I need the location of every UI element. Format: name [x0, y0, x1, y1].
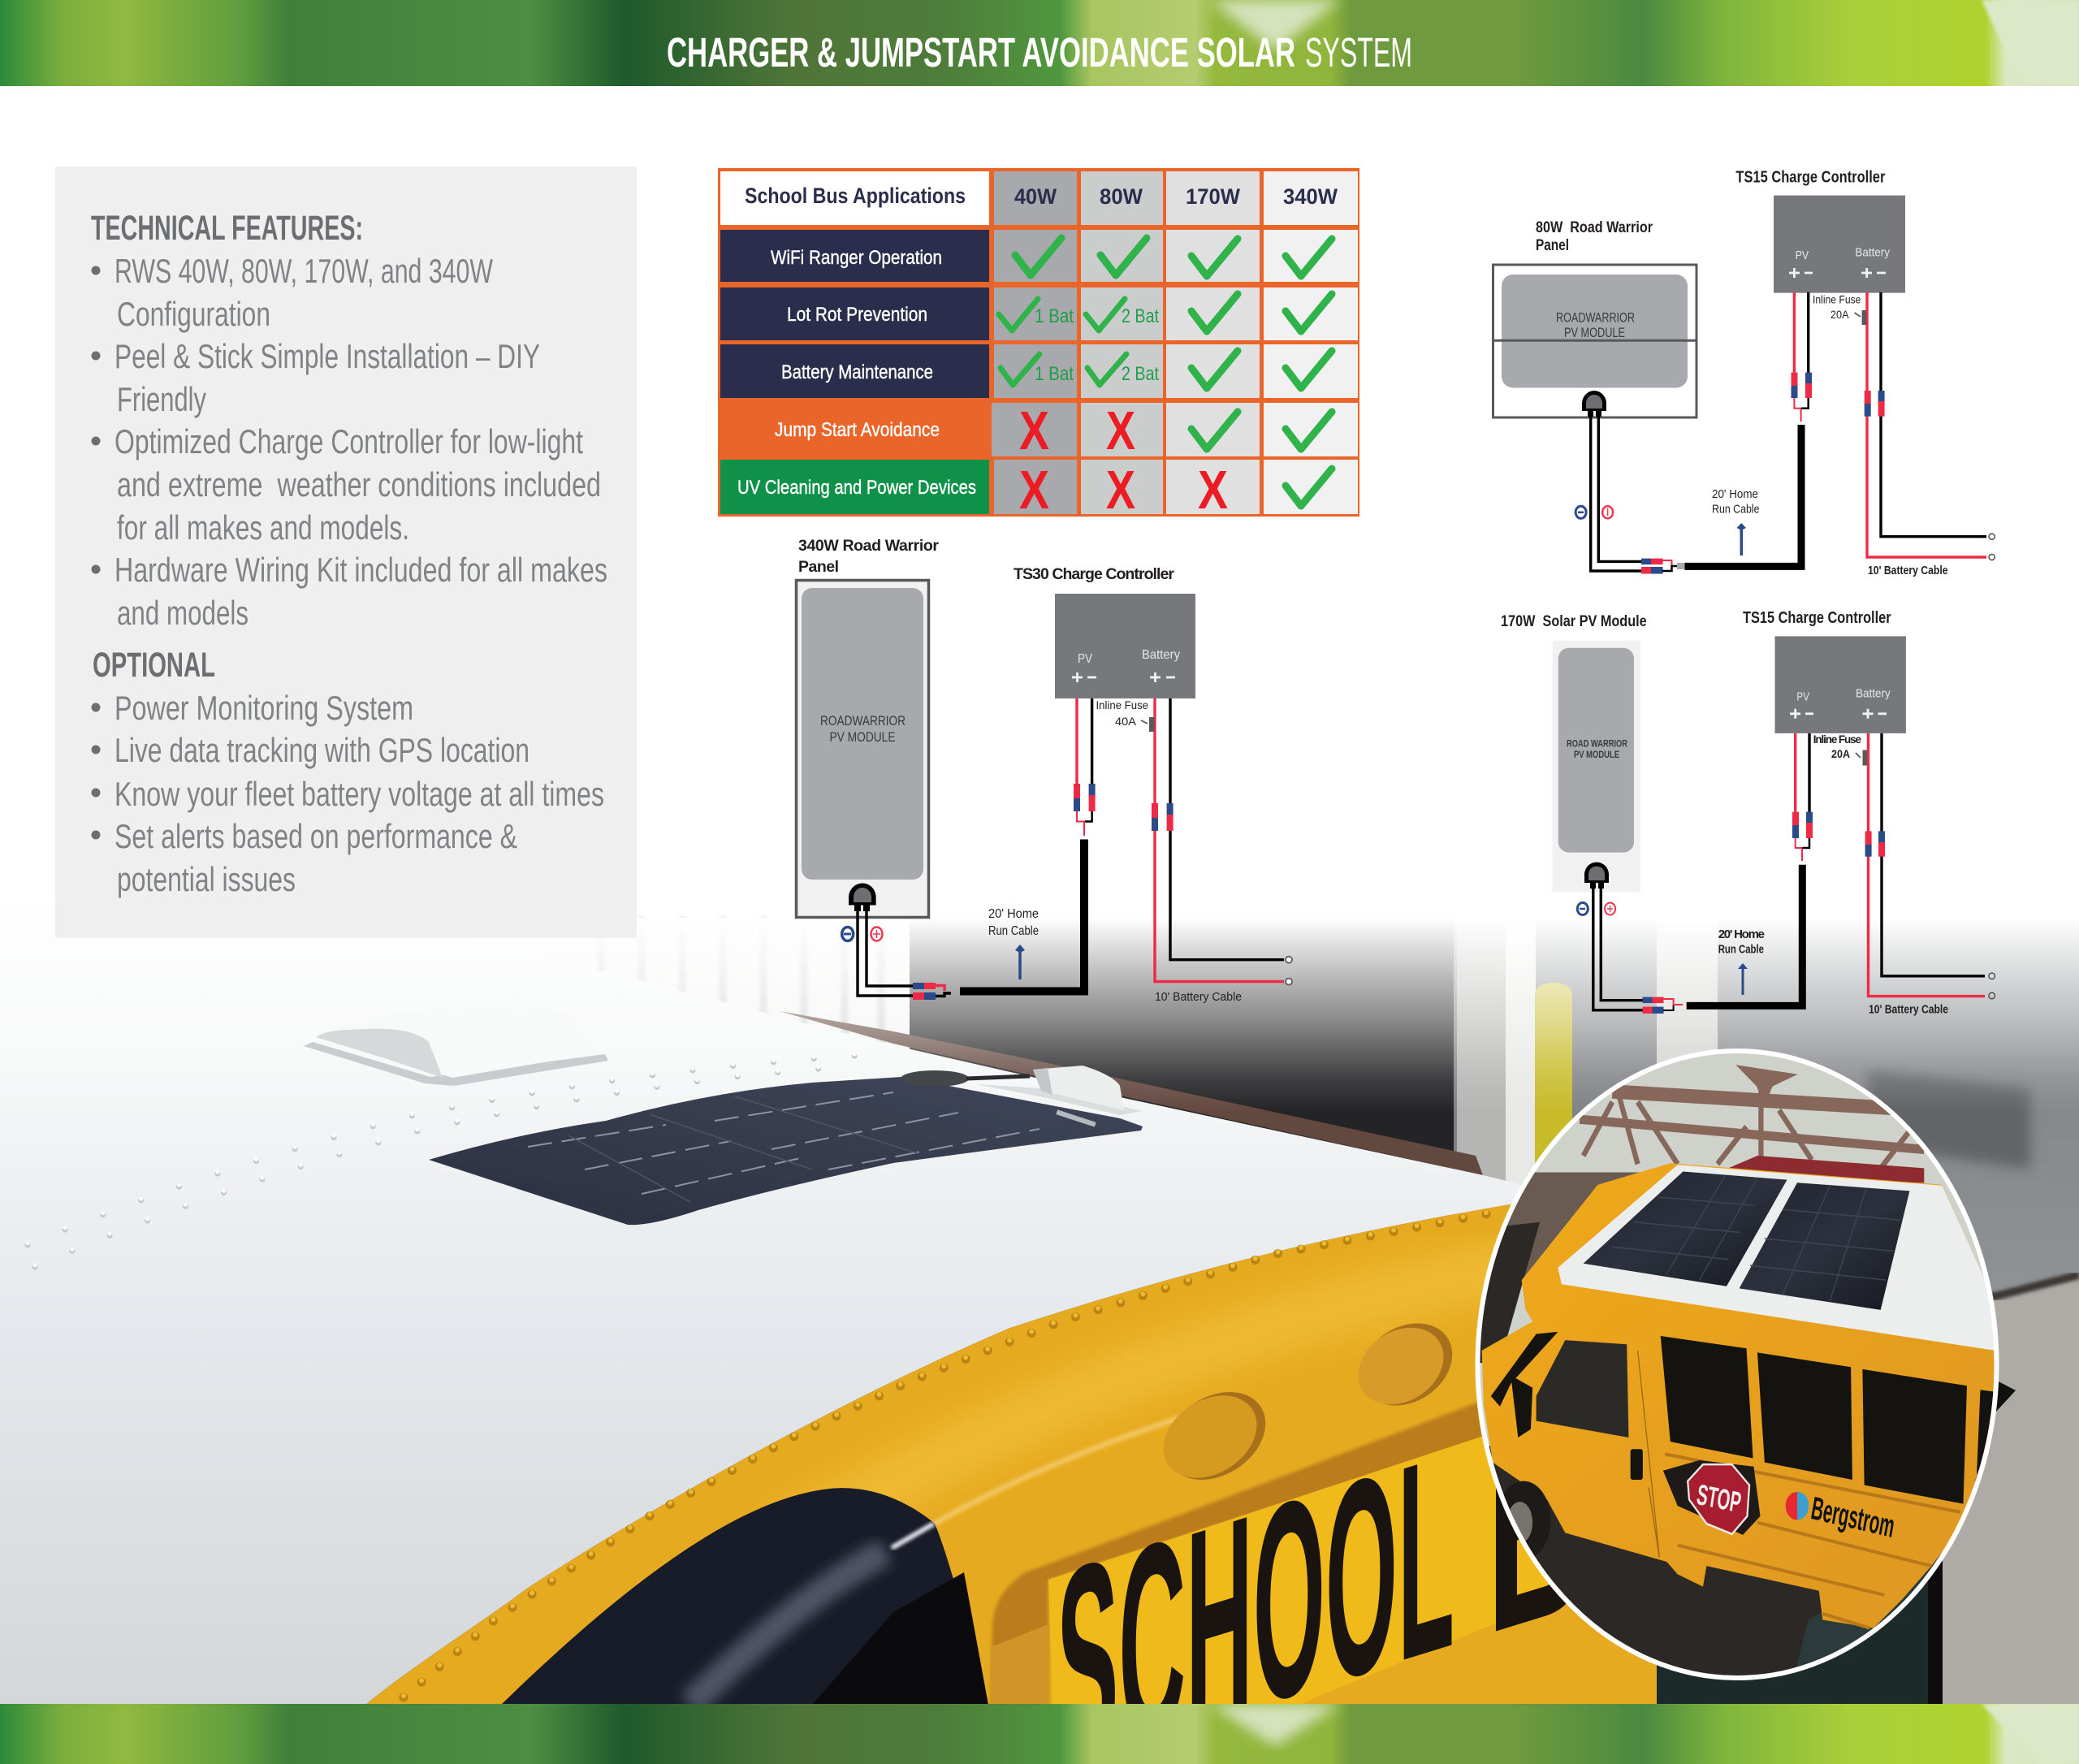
battery count labels: 1 Bat: [1035, 363, 1074, 385]
panel leads and connectors: [858, 910, 951, 1000]
solar panel: [1493, 265, 1697, 417]
home run cable label: Run Cable: [988, 924, 1039, 938]
roof vent: [304, 1028, 608, 1086]
inline fuse: Inline Fuse: [1813, 294, 1861, 305]
X marks: X: [1106, 400, 1135, 461]
solar panel: ROADWARRIOR: [820, 714, 906, 729]
battery count labels: 1 Bat: [1035, 305, 1074, 327]
TS15 charge controller: Battery: [1855, 246, 1890, 260]
X marks: X: [1019, 400, 1049, 461]
inline fuse: Inline Fuse: [1096, 698, 1148, 711]
optional list: Live data tracking with GPS location: [115, 731, 529, 769]
home run cable label: 20' Home: [988, 907, 1039, 921]
features list: Friendly: [117, 380, 206, 418]
table cell backgrounds: [720, 171, 1358, 514]
title: SYSTEM: [1305, 29, 1412, 76]
TS15 charge controller: PV: [1796, 249, 1809, 262]
wheel: [1504, 1481, 1551, 1556]
solar panel on roof: [429, 1070, 1143, 1225]
yellow bus side: [365, 1194, 1657, 1705]
SCHOOL lettering on bus: [1062, 1464, 1566, 1704]
bus body: [1482, 1163, 2004, 1628]
controller title: TS15 Charge Controller: [1735, 168, 1886, 186]
features list: RWS 40W, 80W, 170W, and 340W: [115, 252, 493, 290]
inline fuse: 20A: [1831, 748, 1850, 760]
bottom green band: [0, 1704, 2079, 1764]
table header labels: School Bus Applications: [745, 184, 966, 208]
home run cable arrow: [1737, 523, 1746, 556]
table row labels: WiFi Ranger Operation: [771, 247, 942, 269]
battery count labels: 2 Bat: [1122, 363, 1159, 385]
Bergstrom logo: Bergstrom: [1809, 1489, 1897, 1544]
panel leads and connectors: [1593, 888, 1683, 1014]
panel title: [798, 537, 939, 576]
side stripes: [1665, 1454, 1960, 1628]
battery count labels: 2 Bat: [1122, 305, 1159, 327]
features list: and models: [117, 594, 249, 632]
panel title: 170W Solar PV Module: [1501, 612, 1647, 630]
polarity icons: [1577, 903, 1615, 914]
optional list: Power Monitoring System: [115, 689, 413, 727]
TS15 charge controller: [1774, 196, 1905, 293]
battery cable label: 10' Battery Cable: [1868, 564, 1947, 577]
solar panel: PV MODULE: [1574, 750, 1619, 760]
table row labels: UV Cleaning and Power Devices: [737, 477, 976, 499]
panel title: Panel: [1536, 236, 1569, 254]
home run cable: [1687, 865, 1802, 1005]
SCHOOL lettering on bus: B: [1486, 1351, 1592, 1694]
inline fuse: [1813, 733, 1867, 765]
panel title: Panel: [798, 558, 839, 576]
home run cable label: Run Cable: [1712, 502, 1759, 517]
inline fuse: 20A: [1830, 309, 1849, 321]
table row labels: Lot Rot Prevention: [787, 304, 927, 326]
table row labels: Battery Maintenance: [781, 361, 933, 383]
table header labels: 80W: [1100, 184, 1143, 209]
features list: [91, 252, 607, 632]
TS30 charge controller: Battery: [1142, 648, 1180, 662]
building backdrop: [366, 916, 2079, 1704]
solar panel: [796, 580, 929, 918]
features list: for all makes and models.: [117, 508, 409, 547]
bridge railing: [1580, 1066, 1924, 1168]
PV side wiring: [1792, 733, 1813, 861]
home run cable label: 20' Home: [1712, 487, 1758, 501]
table header labels: 40W: [1014, 184, 1057, 209]
home run cable: [960, 840, 1084, 991]
TS15 charge controller: [1775, 636, 1906, 733]
white bus roof: [1558, 1165, 2000, 1351]
panel: technical features: [55, 166, 637, 938]
TS30 charge controller: [1055, 594, 1195, 698]
home run cable label: [988, 907, 1039, 938]
features list: Hardware Wiring Kit included for all makes: [115, 551, 607, 589]
inline fuse: [1096, 698, 1155, 732]
solar panel: ROADWARRIOR: [1556, 311, 1635, 326]
home run cable arrow: [1015, 945, 1025, 979]
features list: Configuration: [117, 295, 270, 333]
junction box: [1584, 863, 1609, 888]
TS15 charge controller: Battery: [1856, 686, 1891, 700]
inline fuse: 40A: [1115, 715, 1137, 728]
optional list: potential issues: [117, 860, 296, 898]
X marks: X: [1198, 460, 1228, 521]
roof rivets: [28, 1053, 870, 1267]
battery side wiring: [1152, 698, 1292, 985]
inline fuse: [1813, 294, 1866, 325]
polarity icons: [842, 927, 882, 940]
optional list: Set alerts based on performance &: [115, 817, 517, 855]
white antenna mount: [976, 1066, 1143, 1115]
table header labels: 340W: [1283, 184, 1338, 209]
panel title: 80W Road Warrior: [1536, 218, 1653, 236]
home run cable label: 20' Home: [1718, 927, 1765, 941]
X marks: X: [1106, 460, 1135, 521]
wiring diagram: 170W Solar PV Module: [1501, 609, 1995, 1017]
heading: optional: OPTIONAL: [93, 646, 215, 685]
wiring diagram: 340W Road Warrior: [796, 537, 1292, 1004]
controller title: TS30 Charge Controller: [1014, 565, 1174, 583]
PV side wiring: [1792, 292, 1812, 422]
home run cable: [1684, 425, 1801, 566]
solar panel: ROAD WARRIOR: [1567, 739, 1628, 749]
solar panel: PV MODULE: [1564, 326, 1625, 340]
stop sign: [1663, 1460, 1761, 1535]
TS15 charge controller: PV: [1796, 690, 1809, 704]
Bergstrom logo: [1785, 1491, 1894, 1537]
table header labels: [745, 184, 1338, 209]
roof solar panels: [1584, 1171, 1909, 1310]
junction box: [1582, 391, 1606, 417]
panel leads and connectors: [1591, 416, 1684, 573]
polarity icons: [1575, 506, 1613, 518]
panel title: 340W Road Warrior: [798, 537, 939, 555]
features list: and extreme weather conditions included: [117, 465, 601, 504]
battery side wiring: [1865, 733, 1995, 999]
check marks: [999, 238, 1332, 506]
features list: Optimized Charge Controller for low-light: [115, 422, 583, 460]
inline fuse: Inline Fuse: [1813, 733, 1861, 746]
table row labels: [737, 247, 976, 499]
features list: Peel & Stick Simple Installation – DIY: [115, 337, 540, 375]
battery cable label: 10' Battery Cable: [1869, 1004, 1948, 1017]
inset photo: bus with solar panels: [1462, 1040, 2014, 1694]
battery side wiring: [1865, 292, 1995, 560]
optional list: Know your fleet battery voltage at all times: [115, 775, 604, 813]
PV side wiring: [1074, 698, 1096, 836]
black window arch: [501, 1488, 988, 1705]
solar panel: [1553, 640, 1640, 892]
X marks: [1019, 400, 1228, 521]
home run cable arrow: [1738, 963, 1748, 995]
home run cable label: [1718, 927, 1765, 957]
road under bus: [1467, 1222, 1990, 1694]
header band: [0, 0, 2079, 86]
white bus roof: [0, 893, 1527, 1705]
stop sign: STOP: [1695, 1479, 1743, 1520]
amber marker lights: [1148, 1307, 1467, 1498]
controller title: TS15 Charge Controller: [1743, 609, 1891, 627]
home run cable label: Run Cable: [1718, 942, 1764, 957]
table row labels: Jump Start Avoidance: [775, 419, 940, 441]
optional list: [91, 689, 604, 898]
junction box: [849, 884, 876, 911]
home run cable label: [1712, 487, 1759, 517]
background photo: school bus roof: [0, 893, 2079, 1764]
panel: applications table: [718, 168, 1359, 521]
title: CHARGER & JUMPSTART AVOIDANCE SOLAR: [667, 29, 1295, 76]
wiring diagram: 80W Road Warrior: [1493, 168, 1995, 577]
heading: technical features: TECHNICAL FEATURES:: [91, 209, 363, 248]
X marks: X: [1019, 460, 1049, 521]
TS30 charge controller: PV: [1078, 652, 1092, 666]
battery cable label: 10' Battery Cable: [1155, 990, 1242, 1004]
windows: [1491, 1332, 1997, 1504]
table header labels: 170W: [1186, 184, 1240, 209]
panel title: [1536, 218, 1653, 254]
battery count labels: [1035, 305, 1159, 385]
solar panel: PV MODULE: [830, 730, 895, 745]
